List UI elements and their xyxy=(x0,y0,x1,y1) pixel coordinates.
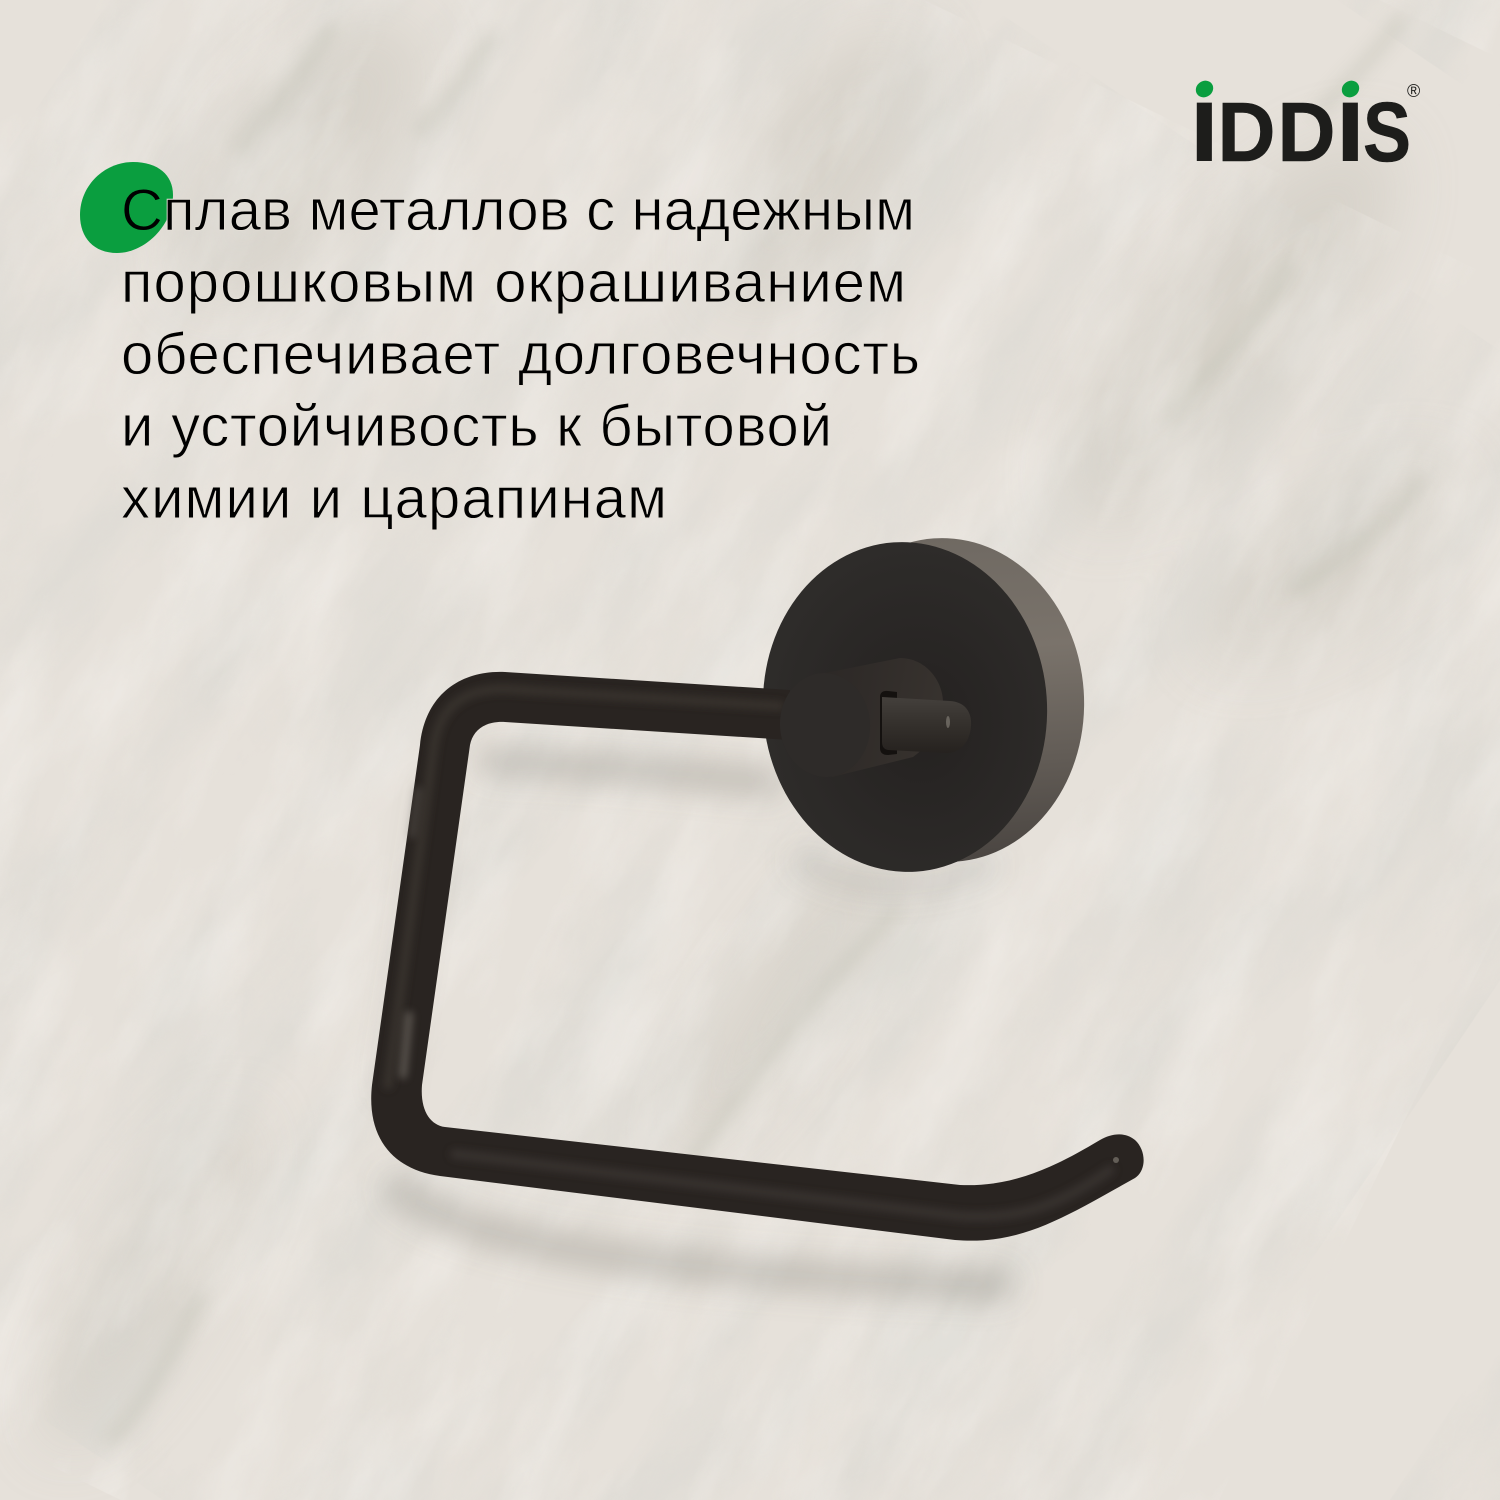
text block: product description: порошковым окрашиванием xyxy=(121,250,906,315)
logo: IDDIS: ı xyxy=(1189,62,1220,185)
shadow: product on wall xyxy=(390,762,1000,1285)
logo: IDDIS: D xyxy=(1278,85,1336,179)
text block: product description: химии и царапинам xyxy=(121,466,667,531)
product: toilet paper holder xyxy=(371,529,1144,1241)
text block: product description: Сплав металлов с надежным xyxy=(121,178,915,243)
logo: IDDIS xyxy=(1189,62,1420,185)
mounting pin xyxy=(880,691,971,755)
logo: IDDIS: S xyxy=(1363,85,1411,179)
text block: product description xyxy=(121,178,920,531)
logo letters: D xyxy=(1218,85,1276,179)
text block: product description: и устойчивость к бытовой xyxy=(121,394,832,459)
logo: IDDIS: ı xyxy=(1335,62,1366,185)
holder arm xyxy=(371,672,1144,1241)
arm mount cylinder xyxy=(776,658,943,780)
text block: product description: обеспечивает долговечность xyxy=(121,322,920,387)
logo: IDDIS: ® xyxy=(1407,81,1420,101)
green accent blob xyxy=(80,162,173,253)
wall plate xyxy=(752,529,1095,882)
